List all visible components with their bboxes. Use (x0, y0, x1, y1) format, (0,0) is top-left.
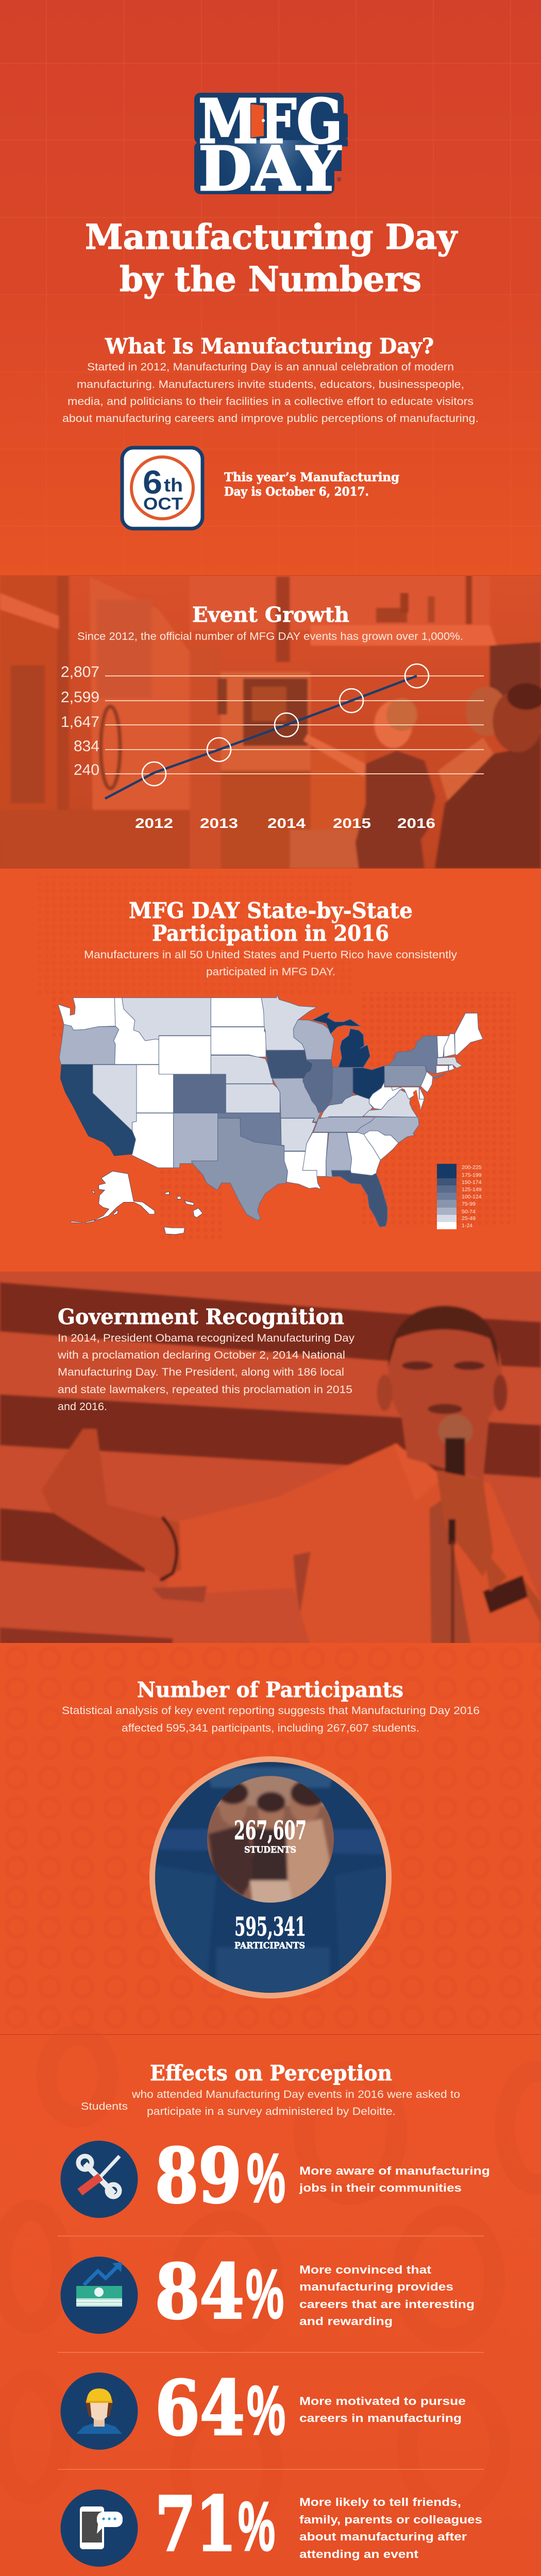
text block: participants summary: affected 595,341 participants, including 267,607 students. (122, 1722, 419, 1734)
legend: events per state: 175-199 (462, 1172, 482, 1178)
panel: number of participants (0, 1643, 541, 2035)
text block: proclamation: and 2016. (58, 1401, 107, 1413)
text block: map subtitle (84, 949, 458, 978)
text block: this year's date: Day is October 6, 2017. (224, 485, 369, 499)
text block: this year's date (224, 470, 399, 499)
legend: events per state (437, 1164, 482, 1229)
heading: Number of Participants: Number of Participants (137, 1677, 403, 1702)
text block: proclamation: Manufacturing Day. The President, along with 186 local (58, 1366, 344, 1378)
legend: events per state: 1-24 (462, 1223, 472, 1229)
text block: proclamation: In 2014, President Obama recognized Manufacturing Day (58, 1332, 355, 1344)
legend: events per state: 125-149 (462, 1187, 482, 1193)
icon: 6th Oct calendar (122, 448, 202, 529)
text block: intro paragraph: media, and politicians to their facilities in a collective effort to educate visitors (67, 396, 474, 408)
text block: participants summary: Statistical analysis of key event reporting suggests that Manufacturing Day 2016 (62, 1705, 480, 1717)
icon: money and rising arrow (61, 2257, 138, 2334)
logo: MFG DAY: ® (337, 177, 341, 183)
text block: growth subtitle: Since 2012, the official number of MFG DAY events has grown over 1,000%. (77, 631, 463, 642)
stat: 64 percent: More motivated to pursue (299, 2395, 466, 2408)
text block: survey description: participate in a survey administered by Deloitte. (147, 2106, 396, 2117)
text block: proclamation: and state lawmakers, repeated this proclamation in 2015 (58, 1384, 352, 1396)
heading: Event Growth: Event Growth (192, 603, 349, 627)
heading: state by state: Participation in 2016 (152, 921, 389, 946)
heading: state by state: MFG DAY State-by-State (129, 898, 413, 923)
chart: nested participant circles: 595,341 (234, 1911, 306, 1942)
title: by the Numbers (120, 259, 421, 299)
stat: 71 percent: 71 (155, 2481, 236, 2568)
legend: events per state: 25-49 (462, 1215, 476, 1222)
heading: state by state (129, 898, 413, 946)
text block: this year's date: This year’s Manufacturing (224, 470, 399, 484)
line chart: events per year: 2,807 (61, 664, 99, 681)
line chart: events per year: 1,647 (61, 714, 99, 731)
heading: Government Recognition: Government Recognition (58, 1304, 344, 1329)
text block: intro paragraph: about manufacturing careers and improve public perceptions of manufacturing. (62, 413, 479, 425)
stat: 84 percent: More convinced that (299, 2263, 432, 2276)
icon: worker with hard hat (61, 2372, 138, 2450)
panel: state by state map (0, 869, 541, 1272)
icon: 6th Oct calendar: 6 (143, 464, 162, 501)
stat: 89 percent: % (247, 2139, 285, 2217)
heading: Effects on Perception: Effects on Perception (150, 2061, 392, 2086)
line chart: events per year: 2016 (397, 816, 435, 831)
line chart: events per year: 2015 (333, 816, 371, 831)
stat: 84 percent: and rewarding (299, 2315, 393, 2328)
panel: intro header (0, 0, 541, 575)
legend: events per state: 50-74 (462, 1209, 476, 1215)
line chart: events per year: 2012 (135, 816, 173, 831)
map: United States choropleth (58, 994, 483, 1234)
stat: 84 percent: manufacturing provides (299, 2280, 453, 2293)
logo: MFG DAY: MFG (198, 86, 343, 157)
heading: What Is Manufacturing Day?: What Is Manufacturing Day? (105, 334, 434, 359)
stat: 64 percent: careers in manufacturing (299, 2412, 462, 2425)
icon: wrench and screwdriver (61, 2141, 138, 2218)
stat: 71 percent (61, 2481, 482, 2568)
text block: proclamation: with a proclamation declaring October 2, 2014 National (57, 1349, 345, 1361)
stat: 71 percent: about manufacturing after (299, 2530, 467, 2543)
legend: events per state: 150-174 (462, 1179, 482, 1185)
stat: 84 percent: 84 (155, 2248, 244, 2336)
icon: phone with speech bubble (61, 2489, 138, 2567)
text block: survey description (81, 2089, 460, 2117)
stat: 89 percent: jobs in their communities (299, 2181, 462, 2194)
legend: events per state: 100-124 (462, 1194, 482, 1200)
stat: 64 percent (61, 2365, 466, 2452)
stat: 71 percent: family, parents or colleagues (299, 2513, 482, 2526)
legend: events per state: 200-225 (462, 1164, 482, 1171)
text block: survey description: Students (81, 2101, 128, 2112)
text block: participants summary (62, 1705, 480, 1734)
stat: 64 percent: % (247, 2371, 285, 2449)
panel: event growth (0, 575, 541, 869)
line chart: events per year: 834 (74, 738, 99, 755)
stat: 84 percent: careers that are interesting (299, 2298, 475, 2311)
legend: events per state: 75-99 (462, 1201, 476, 1207)
line chart: events per year: 2013 (200, 816, 238, 831)
line chart: events per year: 2,599 (61, 689, 99, 706)
panel: government recognition (0, 1272, 541, 1646)
logo: MFG DAY: DAY (198, 133, 342, 205)
line chart: events per year: 240 (74, 761, 99, 778)
chart: nested participant circles: STUDENTS (244, 1845, 296, 1855)
text block: survey description: who attended Manufacturing Day events in 2016 were asked to (131, 2089, 460, 2100)
stat: 89 percent: 89 (155, 2132, 242, 2220)
text block: map subtitle: participated in MFG DAY. (206, 966, 335, 978)
line chart: events per year (61, 664, 484, 831)
stat: 84 percent: % (246, 2255, 284, 2333)
stat: 71 percent: attending an event (299, 2548, 419, 2561)
chart: nested participant circles: 267,607 (234, 1815, 307, 1845)
stat: 71 percent: % (238, 2487, 275, 2565)
stat: 64 percent: 64 (155, 2365, 245, 2452)
title (85, 217, 458, 299)
text block: proclamation (57, 1332, 355, 1413)
stat: 84 percent (61, 2248, 475, 2336)
icon: 6th Oct calendar: th (164, 474, 183, 496)
line chart: events per year: 2014 (267, 816, 306, 831)
stat: 71 percent: More likely to tell friends, (299, 2496, 461, 2509)
text block: map subtitle: Manufacturers in all 50 United States and Puerto Rico have consistently (84, 949, 458, 961)
logo: MFG DAY (194, 86, 348, 205)
chart: nested participant circles: PARTICIPANTS (234, 1941, 305, 1951)
stat: 89 percent (61, 2132, 490, 2220)
text block: intro paragraph: manufacturing. Manufacturers invite students, educators, businesspeople, (77, 379, 464, 391)
icon: 6th Oct calendar: OCT (143, 494, 183, 513)
chart: nested participant circles (149, 1756, 392, 1998)
panel: effects on perception (0, 2035, 541, 2576)
text block: intro paragraph: Started in 2012, Manufacturing Day is an annual celebration of modern (87, 361, 454, 373)
text block: intro paragraph (62, 361, 479, 425)
stat: 89 percent: More aware of manufacturing (299, 2164, 490, 2177)
title: Manufacturing Day (85, 217, 458, 257)
